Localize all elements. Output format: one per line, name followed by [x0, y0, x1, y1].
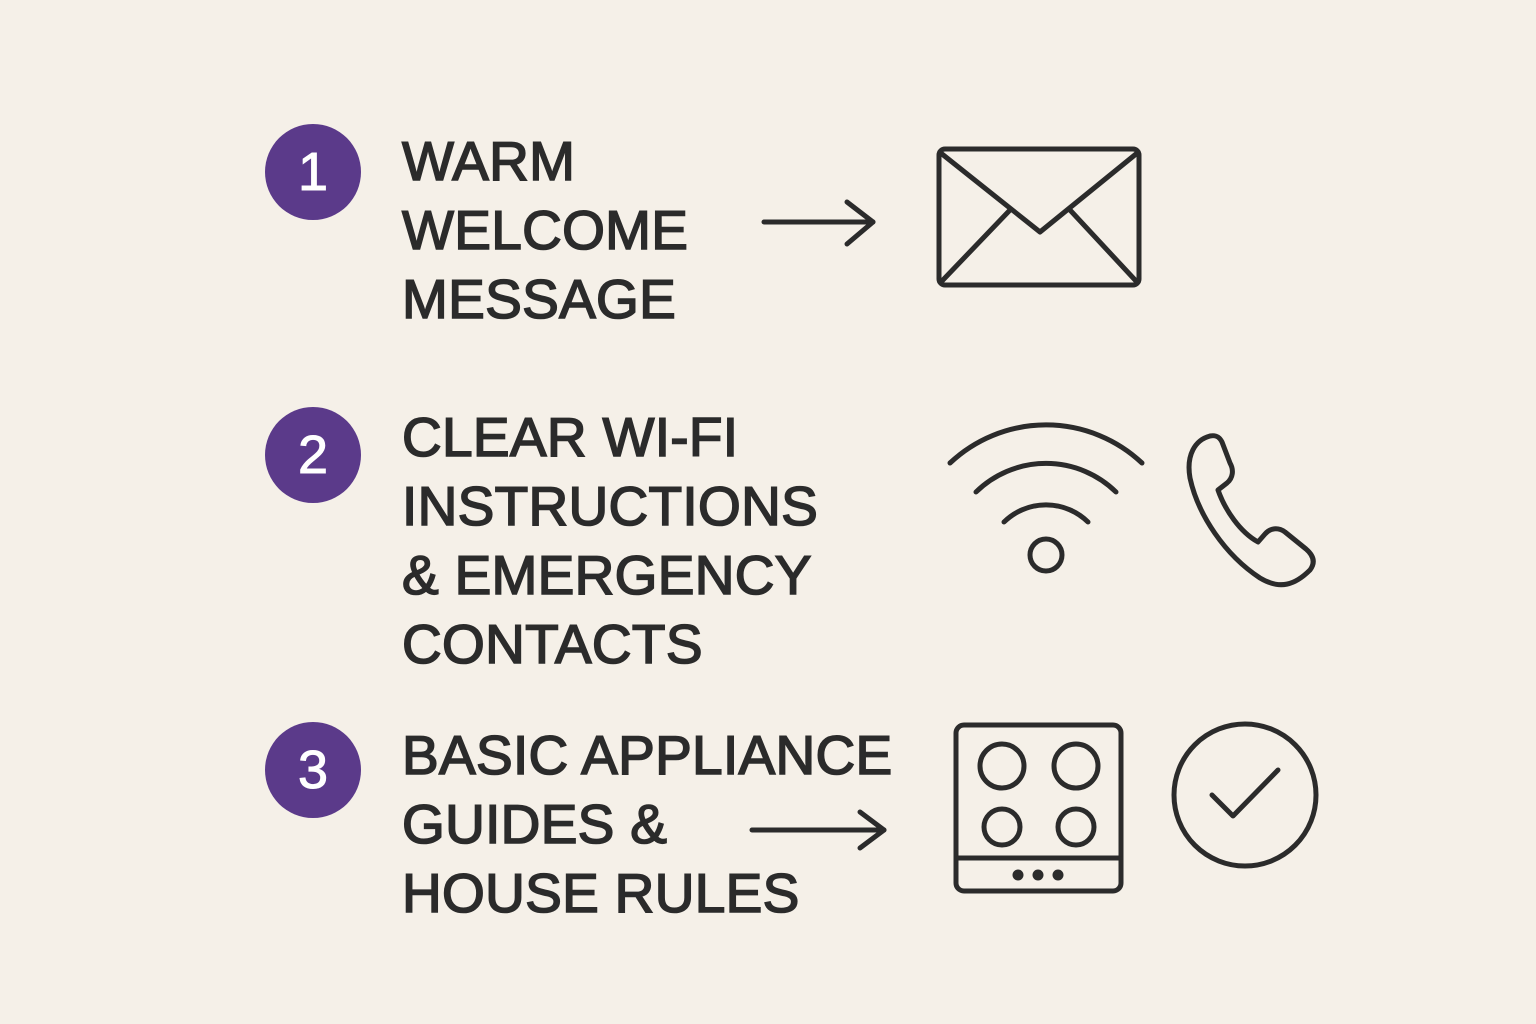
icon: envelope	[939, 149, 1139, 285]
step 2 number: 2	[298, 425, 328, 485]
step 3 text: HOUSE RULES	[402, 862, 800, 924]
icon: stove	[956, 725, 1121, 891]
icon: wifi	[950, 425, 1142, 571]
step 2 text	[402, 406, 818, 675]
step 3 number	[265, 722, 361, 818]
step 3 text	[402, 724, 893, 924]
step 3 number: 3	[298, 740, 328, 800]
step 1 text: MESSAGE	[402, 268, 676, 330]
step 2 text: CLEAR WI-FI	[402, 406, 738, 468]
step 3 text: BASIC APPLIANCE	[402, 724, 893, 786]
step 3 text: GUIDES &	[402, 793, 667, 855]
step 1 text	[401, 130, 688, 330]
arrow 3	[752, 812, 884, 848]
icon: phone	[1189, 436, 1313, 585]
step 1 number	[265, 124, 361, 220]
icon: checkmark circle	[1174, 724, 1316, 866]
step 1 number: 1	[298, 142, 328, 202]
step 1 text: WELCOME	[402, 199, 688, 261]
step 1 text: WARM	[402, 130, 575, 192]
step 2 text: & EMERGENCY	[402, 544, 812, 606]
step 2 text: CONTACTS	[402, 613, 703, 675]
step 2 text: INSTRUCTIONS	[402, 475, 818, 537]
arrow 1	[764, 202, 873, 244]
step 2 number	[265, 407, 361, 503]
